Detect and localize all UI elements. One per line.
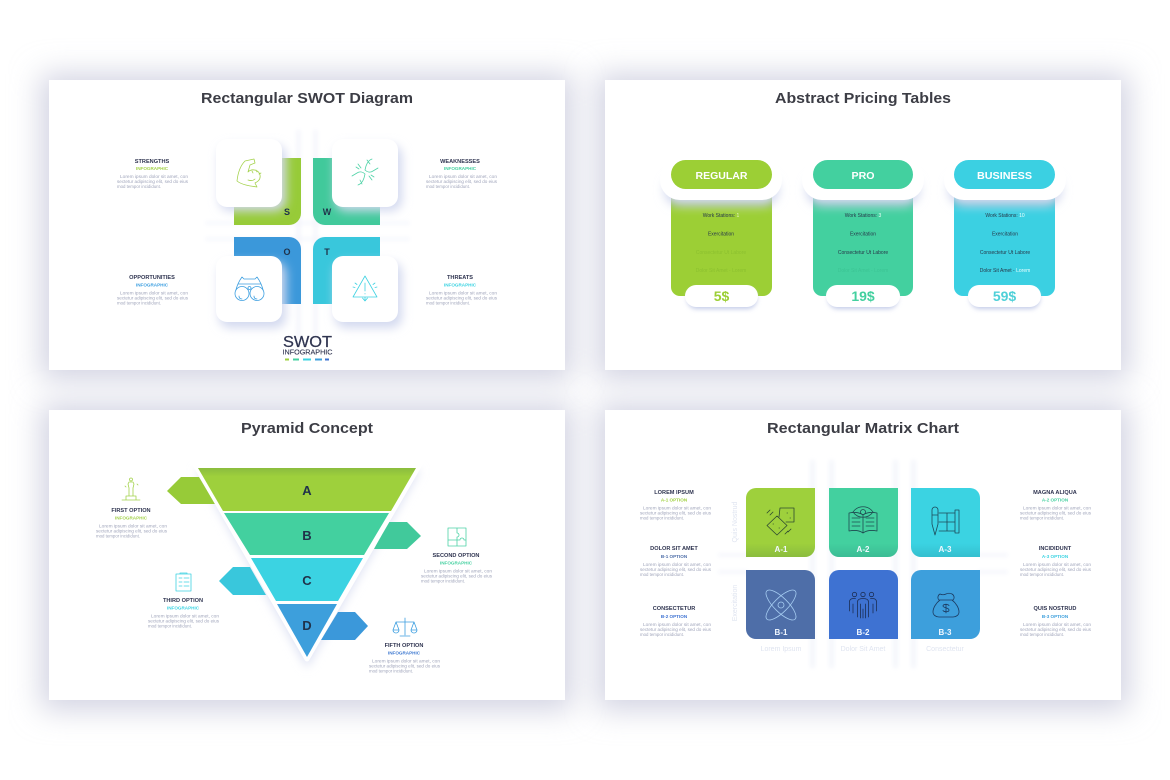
icon: flexed arm xyxy=(237,159,261,187)
pricing column: regular: Consectetur Ut Labore xyxy=(696,250,746,256)
text block: third option: Lorem ipsum dolor sit amet, con xyxy=(151,614,219,618)
icon: warning triangle xyxy=(353,276,377,301)
text block: opportunities: mod tempor incididunt. xyxy=(117,300,161,306)
text block: Magna Aliqua: A-2 OPTION xyxy=(1042,498,1069,502)
quadrant letters: W xyxy=(323,207,332,217)
quadrant W xyxy=(313,158,380,225)
text block: Lorem Ipsum: A-1 OPTION xyxy=(661,498,688,502)
column labels: Dolor Sit Amet xyxy=(841,646,885,653)
title: matrix: Rectangular Matrix Chart xyxy=(767,421,959,437)
text block: fifth option xyxy=(369,643,441,674)
text block: strengths: mod tempor incididunt. xyxy=(117,184,161,189)
pricing column: pro: Consectetur Ut Labore xyxy=(838,250,888,256)
text block: Incididunt: mod tempor incididunt. xyxy=(1020,572,1064,577)
icon: broken chain xyxy=(352,159,378,185)
text block: weaknesses: Lorem ipsum dolor sit amet, con xyxy=(429,174,497,179)
text block: threats: INFOGRAPHIC xyxy=(444,282,477,288)
text block: first option: Lorem ipsum dolor sit amet, con xyxy=(99,524,167,528)
text block: Quis Nostrud xyxy=(1020,606,1092,637)
arrow: first option xyxy=(167,477,215,504)
icon: podium person xyxy=(122,478,140,500)
text block: Magna Aliqua: sectetur adipiscing elit, sed do eius xyxy=(1020,510,1092,516)
title: pyramid: Pyramid Concept xyxy=(241,421,373,437)
text block: third option: sectetur adipiscing elit, sed do eius xyxy=(148,618,220,624)
text block: second option xyxy=(421,553,493,584)
text block: threats: Lorem ipsum dolor sit amet, con xyxy=(429,290,497,296)
cell B-3: B-3 xyxy=(939,628,952,637)
pricing column: pro: 19$ xyxy=(851,288,875,304)
cell B-2: B-2 xyxy=(857,628,870,637)
layer D: D xyxy=(302,618,312,633)
pricing column: business: 59$ xyxy=(993,288,1016,304)
text block: Incididunt: sectetur adipiscing elit, sed do eius xyxy=(1020,567,1092,572)
text block: threats: mod tempor incididunt. xyxy=(426,300,470,306)
text block: Dolor Sit Amet: DOLOR SIT AMET xyxy=(650,546,698,552)
text block: fifth option: Lorem ipsum dolor sit amet, con xyxy=(372,658,440,664)
icon: scales xyxy=(393,618,417,636)
axis label: Quis Nostrud: Quis Nostrud xyxy=(732,501,739,542)
text block: Dolor Sit Amet: B-1 OPTION xyxy=(661,554,688,559)
quadrant letters: O xyxy=(283,247,291,257)
text block: second option: SECOND OPTION xyxy=(433,553,479,559)
text block: Incididunt: A-3 OPTION xyxy=(1042,554,1069,559)
text block: Quis Nostrud: Lorem ipsum dolor sit amet, con xyxy=(1023,622,1091,627)
text block: fifth option: FIFTH OPTION xyxy=(385,643,423,649)
panel: pyramid concept xyxy=(49,410,565,700)
layer B xyxy=(224,513,389,555)
text block: Dolor Sit Amet xyxy=(640,546,712,577)
pricing column: regular: Work Stations: 1 xyxy=(703,213,740,219)
cell B-2 xyxy=(829,570,898,639)
text block: Consectetur: mod tempor incididunt. xyxy=(640,632,684,637)
text block: fifth option: mod tempor incididunt. xyxy=(369,668,413,674)
icon: clipboard xyxy=(176,573,191,591)
quadrant T xyxy=(313,237,380,304)
pricing column: business: BUSINESS xyxy=(977,170,1032,182)
pricing column: pro: Dolor Sit Amet - Lorem xyxy=(838,268,888,274)
arrow: second option xyxy=(374,522,421,549)
text block: Quis Nostrud: mod tempor incididunt. xyxy=(1020,632,1064,637)
text block: opportunities xyxy=(117,275,189,306)
text block: threats: THREATS xyxy=(447,275,473,281)
text block: first option: mod tempor incididunt. xyxy=(96,534,140,538)
text block: Consectetur: sectetur adipiscing elit, sed do eius xyxy=(640,627,712,632)
title: SWOT: Rectangular SWOT Diagram xyxy=(201,91,413,107)
cell A-1 xyxy=(746,488,815,557)
quadrant O xyxy=(234,237,301,304)
text block: Magna Aliqua: Lorem ipsum dolor sit amet, con xyxy=(1023,506,1091,510)
cell A-2 xyxy=(829,488,898,557)
axis label: Exercitation: Exercitation xyxy=(732,585,739,621)
title: pricing: Abstract Pricing Tables xyxy=(775,91,951,107)
cell A-3: A-3 xyxy=(939,545,952,554)
panel: SWOT diagram xyxy=(49,80,565,370)
text block: first option xyxy=(96,508,168,538)
cell B-1: B-1 xyxy=(775,628,788,637)
pricing column: pro: PRO xyxy=(852,170,874,182)
quadrant letters: T xyxy=(324,247,330,257)
text block: Dolor Sit Amet: Lorem ipsum dolor sit amet, con xyxy=(643,562,711,567)
text block: weaknesses: sectetur adipiscing elit, sed do eius xyxy=(426,179,498,184)
layer D xyxy=(277,604,337,657)
cell A-2: A-2 xyxy=(857,545,870,554)
text block: Consectetur xyxy=(640,606,712,637)
text block: Magna Aliqua: MAGNA ALIQUA xyxy=(1033,490,1077,496)
panel: pricing tables xyxy=(605,80,1121,370)
pricing column: pro: Exercitation xyxy=(850,232,876,238)
text block: Consectetur: B-2 OPTION xyxy=(661,614,688,619)
arrow: third option xyxy=(219,567,266,595)
quadrant S xyxy=(234,158,301,225)
pricing column: pro xyxy=(802,158,924,309)
text block: fifth option: sectetur adipiscing elit, sed do eius xyxy=(369,664,441,668)
text block: Lorem Ipsum: sectetur adipiscing elit, sed do eius xyxy=(640,510,712,516)
text block: opportunities: OPPORTUNITIES xyxy=(129,275,175,281)
column labels: Lorem Ipsum xyxy=(761,646,802,653)
text block: first option: sectetur adipiscing elit, sed do eius xyxy=(96,528,168,534)
cell B-1 xyxy=(746,570,815,639)
layer A: A xyxy=(302,483,312,498)
card: opportunities icon xyxy=(216,256,282,322)
pricing column: business xyxy=(944,158,1066,309)
layer C: C xyxy=(302,573,312,588)
text block: Consectetur: Lorem ipsum dolor sit amet, con xyxy=(643,622,711,627)
text block: threats xyxy=(426,275,498,306)
pricing column: regular: Dolor Sit Amet - Lorem xyxy=(696,268,746,274)
text block: Quis Nostrud: sectetur adipiscing elit, sed do eius xyxy=(1020,627,1092,632)
text block: third option: mod tempor incididunt. xyxy=(148,624,192,628)
text block: second option: INFOGRAPHIC xyxy=(440,560,473,566)
column labels: Consectetur xyxy=(926,646,965,653)
text block: third option: THIRD OPTION xyxy=(163,598,203,604)
arrow: fifth option xyxy=(321,612,368,640)
text block: fifth option: INFOGRAPHIC xyxy=(388,650,421,656)
text block: Consectetur: CONSECTETUR xyxy=(653,606,695,612)
panel: matrix chart xyxy=(605,410,1121,700)
layer B: B xyxy=(302,528,312,543)
icon: puzzle xyxy=(448,528,466,546)
card: strengths icon xyxy=(216,139,282,207)
column labels xyxy=(761,646,965,653)
pricing column: regular: REGULAR xyxy=(696,170,748,182)
text block: opportunities: INFOGRAPHIC xyxy=(136,282,169,288)
SWOT logo: SWOT xyxy=(283,334,333,351)
SWOT logo: INFOGRAPHIC xyxy=(282,348,333,356)
text block: third option xyxy=(148,598,220,628)
pyramid frame xyxy=(185,447,430,659)
text block: strengths xyxy=(117,159,189,189)
text block: weaknesses: WEAKNESSES xyxy=(440,159,480,165)
text block: strengths: Lorem ipsum dolor sit amet, con xyxy=(120,174,188,179)
pricing column: regular: Exercitation xyxy=(708,232,734,238)
text block: Incididunt xyxy=(1020,546,1092,577)
text block: Magna Aliqua: mod tempor incididunt. xyxy=(1020,516,1064,520)
text block: opportunities: sectetur adipiscing elit, sed do eius xyxy=(117,296,189,300)
text block: Lorem Ipsum: Lorem ipsum dolor sit amet, con xyxy=(643,506,711,510)
pricing column: business: Consectetur Ut Labore xyxy=(980,250,1030,256)
card: weaknesses icon xyxy=(332,139,398,207)
text block: Magna Aliqua xyxy=(1020,490,1092,520)
text block: Quis Nostrud: QUIS NOSTRUD xyxy=(1034,606,1076,612)
text block: Incididunt: INCIDIDUNT xyxy=(1039,546,1072,552)
text block: second option: Lorem ipsum dolor sit amet, con xyxy=(424,568,492,574)
text block: Incididunt: Lorem ipsum dolor sit amet, con xyxy=(1023,562,1091,567)
pricing column: business: Dolor Sit Amet - Lorem xyxy=(980,268,1030,274)
card: threats icon xyxy=(332,256,398,322)
cell B-3 xyxy=(911,570,980,639)
text block: weaknesses xyxy=(426,159,498,189)
pricing column: regular xyxy=(660,158,782,309)
cell A-3 xyxy=(911,488,980,557)
cell A-1: A-1 xyxy=(775,545,788,554)
text block: weaknesses: mod tempor incididunt. xyxy=(426,184,470,189)
text block: Lorem Ipsum: LOREM IPSUM xyxy=(654,490,694,496)
text block: strengths: INFOGRAPHIC xyxy=(136,166,169,171)
text block: weaknesses: INFOGRAPHIC xyxy=(444,166,477,171)
quadrant letters: S xyxy=(284,207,290,217)
text block: Quis Nostrud: B-3 OPTION xyxy=(1042,614,1069,619)
text block: Lorem Ipsum xyxy=(640,490,712,520)
text block: first option: FIRST OPTION xyxy=(111,508,151,514)
text block: third option: INFOGRAPHIC xyxy=(167,606,200,610)
text block: Dolor Sit Amet: mod tempor incididunt. xyxy=(640,572,684,577)
pricing column: business: Exercitation xyxy=(992,232,1018,238)
text block: second option: sectetur adipiscing elit, sed do eius xyxy=(421,574,493,578)
text block: first option: INFOGRAPHIC xyxy=(115,516,148,520)
layer A xyxy=(198,468,416,511)
text block: opportunities: Lorem ipsum dolor sit amet, con xyxy=(120,290,188,296)
SWOT logo xyxy=(282,334,333,360)
text block: strengths: STRENGTHS xyxy=(135,159,170,165)
layer C xyxy=(251,558,363,601)
text block: strengths: sectetur adipiscing elit, sed do eius xyxy=(117,179,189,184)
icon: binoculars xyxy=(235,277,264,300)
text block: Lorem Ipsum: mod tempor incididunt. xyxy=(640,516,684,520)
quadrant letters xyxy=(283,207,332,257)
text block: threats: sectetur adipiscing elit, sed do eius xyxy=(426,296,498,300)
pricing column: regular: 5$ xyxy=(714,288,729,304)
text block: Dolor Sit Amet: sectetur adipiscing elit, sed do eius xyxy=(640,567,712,572)
pricing column: pro: Work Stations: 3 xyxy=(845,213,882,219)
text block: second option: mod tempor incididunt. xyxy=(421,578,465,584)
pricing column: business: Work Stations: 10 xyxy=(985,213,1025,219)
